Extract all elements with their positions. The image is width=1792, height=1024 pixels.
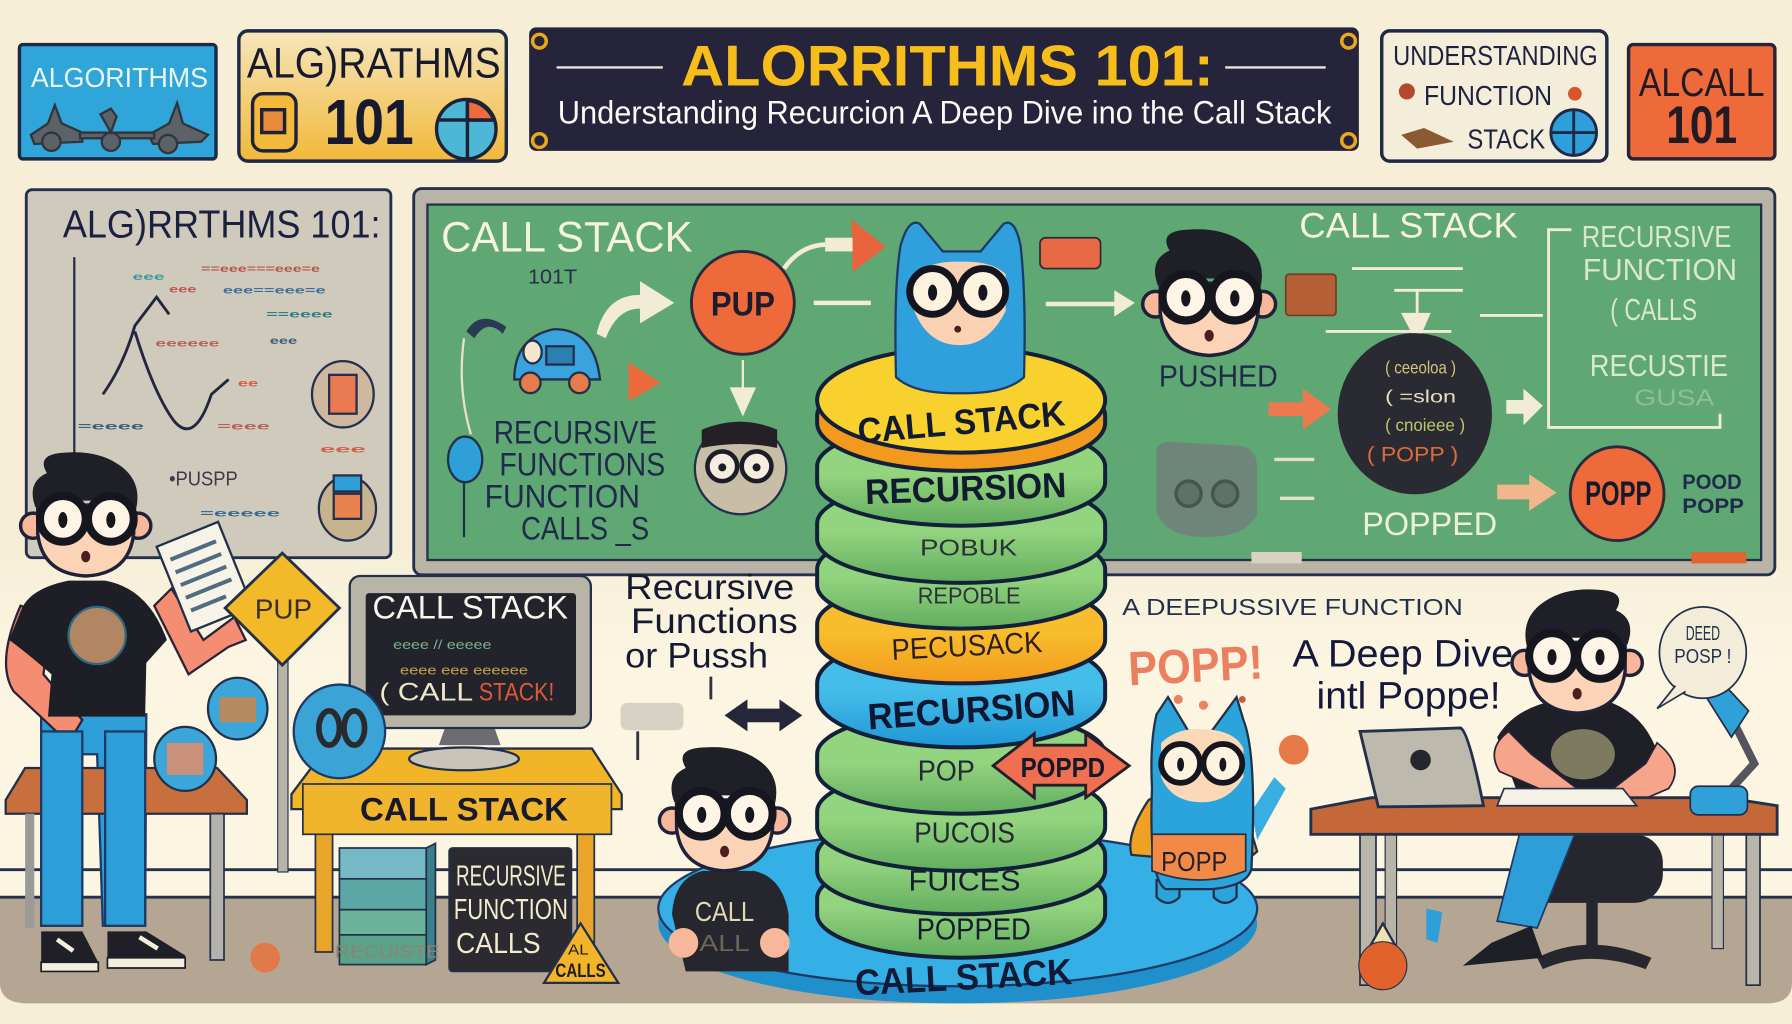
keyboard and notebook <box>1497 789 1637 806</box>
disc: recursion blue: RECURSION <box>866 682 1077 737</box>
icon: linked cars <box>31 103 208 153</box>
text block: recursive functions or push: Recursive <box>625 567 794 607</box>
disc: fuices: FUICES <box>909 865 1021 897</box>
yellow desk: call stack: CALL STACK <box>360 792 568 828</box>
line chart <box>103 297 229 429</box>
label: popp stacked: POPP <box>1682 493 1744 518</box>
monitor: CALL STACK <box>373 589 568 625</box>
disc: pop <box>817 711 1105 814</box>
monitor: STACK! <box>479 679 554 707</box>
subtitle: Understanding Recurcion A Deep Dive ino the Call Stack <box>558 94 1332 130</box>
chair <box>1514 834 1663 969</box>
right desk with laptop <box>1311 728 1777 985</box>
disc: pecusack orange: PECUSACK <box>891 626 1043 667</box>
small chart labels: ee <box>238 378 259 389</box>
arm: right <box>154 589 246 674</box>
speech bubble: deep popp: POSP ! <box>1674 645 1731 668</box>
code circle <box>1338 334 1491 494</box>
banner: alcall 101: 101 <box>1666 96 1737 155</box>
wall and floor scene <box>0 537 1792 1003</box>
warning sign: pup <box>225 553 339 872</box>
code circle: ( cnoieee ) <box>1385 415 1465 435</box>
icon: gray cat head <box>1157 442 1257 537</box>
blurred tag <box>621 703 683 730</box>
banner: algorithms blue <box>19 45 216 159</box>
banner: alcall 101 <box>1629 45 1775 159</box>
shoes <box>41 931 185 971</box>
sign: recursive function calls: CALLS <box>456 928 541 960</box>
arms <box>1494 731 1577 800</box>
code circle: ( ceeoloa ) <box>1385 358 1456 378</box>
icon: blue round face <box>294 685 385 778</box>
disc: repoble: REPOBLE <box>918 582 1021 608</box>
disc: popped: POPPED <box>917 911 1031 946</box>
shirt logo <box>69 607 126 664</box>
banner: understanding function stack <box>1382 31 1607 161</box>
character: standing developer <box>6 452 246 971</box>
text block: a deep dive: A Deep Dive <box>1293 632 1513 674</box>
arrow: down to face <box>731 360 754 414</box>
monitor: eeee // eeeee <box>393 638 491 652</box>
arrow: popped: POPPD <box>1021 752 1105 783</box>
base platform: call stack: CALL STACK <box>854 951 1074 1003</box>
heading: call stack: CALL STACK <box>441 213 693 260</box>
arrow: double headed <box>725 699 802 731</box>
character: small developer: CALL <box>695 896 754 927</box>
lines and arrow: down to code circle <box>1326 269 1543 341</box>
small chart labels: =eee <box>217 422 270 433</box>
leg <box>1497 832 1575 928</box>
monitor <box>350 576 591 770</box>
label: popped: POPPED <box>1362 506 1497 542</box>
bracket box: recursive function calls: RECURSIVE <box>1582 219 1731 254</box>
legs: jeans <box>41 714 146 926</box>
books stack <box>339 843 435 965</box>
icon: jar <box>253 94 296 151</box>
panel: call stack chalkboard: 101T <box>528 265 578 288</box>
disc: call stack yellow: CALL STACK <box>856 393 1067 451</box>
shirt <box>9 581 167 717</box>
torso <box>1497 701 1659 800</box>
bracket box: recursive function calls: RECUSTIE <box>1590 348 1728 383</box>
panel: algorithms chart board: •PUSPP <box>169 468 238 491</box>
text block: a deep dive: intl Poppe! <box>1317 675 1501 717</box>
icon: orange stack <box>312 361 374 427</box>
button: popp: POPP <box>1585 475 1651 513</box>
banner: algorithms blue: ALGORITHMS <box>31 62 208 93</box>
banner: algorithms 101 yellow: 101 <box>325 86 414 158</box>
icon: pushed head <box>1143 229 1276 355</box>
text block: recursive functions: FUNCTIONS <box>499 446 665 482</box>
small chart labels <box>78 264 366 520</box>
character: seated developer <box>1463 589 1675 969</box>
icon: globe <box>1551 110 1597 155</box>
speech bubble: deep popp: DEED <box>1686 622 1720 645</box>
character: small blue cat with popp <box>1130 697 1286 903</box>
code circle: ( =slon <box>1385 386 1456 406</box>
disc: pucois <box>817 768 1105 871</box>
heading: call stack right: CALL STACK <box>1299 206 1518 246</box>
sign: recursive function calls: RECURSIVE <box>456 861 566 893</box>
bracket box: recursive function calls: ( CALLS <box>1610 292 1697 327</box>
disc: call stack yellow <box>817 347 1105 471</box>
arrow: pushed to code <box>1269 389 1331 430</box>
small chart labels: eee==eee=e <box>223 286 326 297</box>
warning triangle: calls <box>544 923 618 983</box>
text: a deepussive function: A DEEPUSSIVE FUNCTION <box>1122 594 1463 620</box>
arrow: car to pup <box>597 281 674 338</box>
arm: left <box>6 606 82 743</box>
label: pushed: PUSHED <box>1159 358 1278 393</box>
button: pup <box>691 251 794 354</box>
bracket box: recursive function calls: GUSA <box>1634 385 1715 411</box>
icon: blue car <box>514 329 600 393</box>
title: ALORRITHMS 101: <box>681 35 1214 99</box>
text block: recursive functions: RECURSIVE <box>494 414 657 450</box>
button: pup: PUP <box>711 285 775 323</box>
disc: pecusack orange <box>817 581 1105 683</box>
disc: fuices <box>817 811 1105 914</box>
sign: recursive function calls <box>449 848 571 971</box>
text block: recursive functions or push <box>625 567 798 675</box>
arrow: cat to head <box>1046 290 1135 317</box>
dashes <box>1274 459 1314 498</box>
code circle: ( POPP ) <box>1367 442 1458 467</box>
yellow desk: call stack <box>291 749 622 952</box>
text block: a deep dive <box>1293 632 1513 717</box>
small chart labels: =eeee <box>78 422 145 433</box>
arrow: dash <box>814 301 871 305</box>
disc: recursion blue <box>817 633 1105 747</box>
small chart labels: eee <box>133 272 165 283</box>
left side table <box>6 768 247 960</box>
arrow: to popp button <box>1497 474 1557 511</box>
text block: recursive functions <box>485 414 665 546</box>
icon: floating circle lower <box>154 727 216 791</box>
warning sign: pup: PUP <box>255 593 312 624</box>
small chart labels: eee <box>270 336 298 347</box>
bracket box: recursive function calls <box>1549 219 1737 427</box>
call stack discs <box>817 347 1105 958</box>
text block: recursive functions: FUNCTION <box>485 478 640 514</box>
icon: floating circle upper <box>208 678 267 739</box>
sign: recursive function calls: FUNCTION <box>454 894 568 926</box>
small chart labels: =eeeee <box>200 509 281 520</box>
heading: ALG)RRTHMS 101: <box>63 204 381 247</box>
disc: recursion green <box>817 423 1105 526</box>
disc: recursion green: RECURSION <box>865 465 1067 512</box>
icon: blue stack <box>319 475 376 541</box>
base platform: call stack <box>658 831 1257 1003</box>
speech bubble: deep popp <box>1657 607 1746 709</box>
small chart labels: ==eeee <box>266 310 333 321</box>
label: popp stacked <box>1682 469 1744 518</box>
small chart labels: ==eee===eee=e <box>201 264 320 275</box>
floor objects: cone and ball <box>1359 909 1442 990</box>
arrow: code to box <box>1506 389 1543 425</box>
banner: algorithms 101 yellow: ALG)RATHMS <box>247 40 501 87</box>
banner: algorithms 101 yellow <box>239 31 506 161</box>
icon: gray face <box>695 422 786 514</box>
icon: paper sheet <box>157 522 252 632</box>
warning triangle: calls: CALLS <box>555 960 606 982</box>
arrow: pup to triangle <box>784 219 886 272</box>
monitor: eeee eee eeeeee <box>400 663 528 677</box>
laptop <box>1360 728 1483 807</box>
monitor: ( CALL <box>379 679 473 707</box>
icon: brown box <box>1286 274 1336 315</box>
tag: orange <box>1040 238 1101 269</box>
faded label: RECUISTE <box>335 942 440 962</box>
orange ball <box>250 943 280 973</box>
disc: pop: POP <box>918 756 975 788</box>
icon: globe <box>437 99 496 159</box>
exclamation: popp: POPP! <box>1127 636 1264 696</box>
disc: popped <box>817 855 1105 958</box>
banner: understanding function stack: UNDERSTANDING <box>1393 40 1598 71</box>
lamp <box>1690 680 1754 815</box>
icon: small orange dot <box>1279 735 1309 765</box>
panel: call stack chalkboard <box>414 189 1775 575</box>
disc: pucois: PUCOIS <box>914 817 1015 849</box>
small chart labels: eee <box>169 285 197 296</box>
text block: recursive functions: CALLS _S <box>521 510 649 546</box>
character: small developer: ALL <box>699 930 750 956</box>
icon: orange triangle <box>629 362 661 401</box>
jeans front of table <box>41 731 145 926</box>
character: blue cat on stack <box>895 223 1025 393</box>
small marks <box>638 677 711 760</box>
title banner <box>529 27 1359 151</box>
disc: repoble <box>817 526 1105 629</box>
banner: understanding function stack: STACK <box>1467 124 1545 155</box>
bracket box: recursive function calls: FUNCTION <box>1583 252 1737 287</box>
small chart labels: eeeeee <box>155 338 220 349</box>
button: popp <box>1570 447 1664 541</box>
warning triangle: calls: AL <box>568 942 589 958</box>
arrow: popped <box>993 734 1129 798</box>
panel: algorithms chart board <box>26 190 391 558</box>
small chart labels: eee <box>320 445 366 456</box>
text block: recursive functions or push: Functions <box>631 601 798 641</box>
label: popp stacked: POOD <box>1682 469 1742 494</box>
shoe <box>1463 926 1543 966</box>
character: small blue cat with popp: POPP <box>1161 846 1227 877</box>
banner: understanding function stack: FUNCTION <box>1424 80 1552 111</box>
text block: recursive functions or push: or Pussh <box>625 635 768 675</box>
icon: glasses and string <box>448 319 506 537</box>
disc: poblik <box>817 480 1105 583</box>
disc: poblik: POBUK <box>920 534 1017 560</box>
banner: alcall 101: ALCALL <box>1639 61 1765 105</box>
character: small developer <box>659 747 790 971</box>
